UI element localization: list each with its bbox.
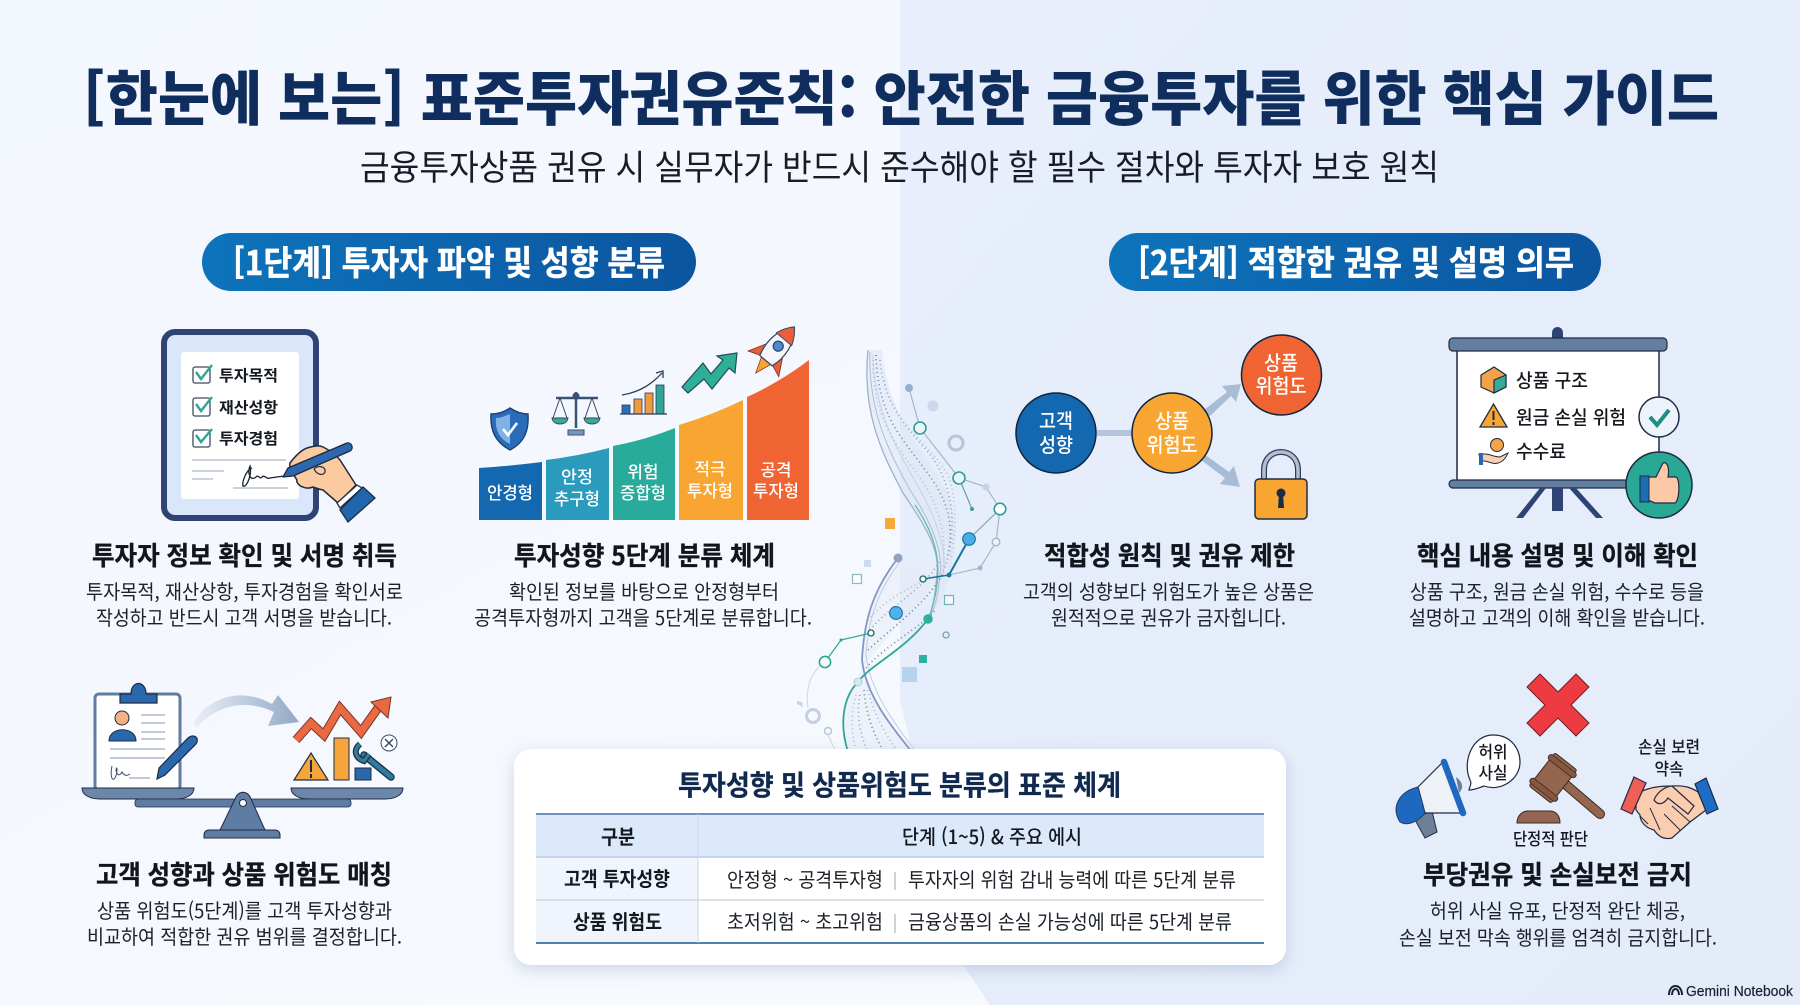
text block: 손실 보전 막속 행위를 엄격히 금지합니다. bbox=[1399, 922, 1717, 951]
icon: shield bbox=[491, 408, 528, 450]
chart: rising risk bars bbox=[479, 360, 809, 520]
icon: megaphone with speech bubble bbox=[1396, 735, 1520, 838]
chart: rising risk bars: 투자형 bbox=[753, 477, 799, 502]
panel: matching customer and product bbox=[82, 684, 403, 950]
panel: key explanation bbox=[1409, 327, 1705, 631]
text block: 허위 사실 유포, 단정적 완단 체공, bbox=[1430, 895, 1685, 924]
text block bbox=[1399, 895, 1717, 951]
heading: 고객 성향과 상품 위험도 매칭 bbox=[96, 855, 392, 892]
text block: 원적적으로 권유가 금자힙니다. bbox=[1051, 602, 1286, 631]
panel: five-level classification bbox=[474, 314, 812, 631]
diagram: suitability flow: 위험도 bbox=[1256, 370, 1306, 399]
heading: 투자자 정보 확인 및 서명 취득 bbox=[92, 536, 397, 573]
icon: handshake with label: 손실 보련 bbox=[1638, 733, 1700, 758]
diagram: suitability flow bbox=[1016, 335, 1322, 487]
icon: presentation board: 수수료 bbox=[1516, 437, 1566, 464]
icon: tablet checklist with signing hand bbox=[164, 332, 375, 522]
heading: step 1 pill: [1단계] 투자자 파악 및 성향 분류 bbox=[233, 236, 665, 285]
panel: suitability principle bbox=[1016, 335, 1322, 631]
diagram: suitability flow: 고객 bbox=[1039, 405, 1073, 434]
text block: 설명하고 고객의 이해 확인을 받습니다. bbox=[1409, 602, 1705, 631]
icon: tablet checklist with signing hand: 투자경험 bbox=[219, 427, 278, 449]
heading: 핵심 내용 설명 및 이해 확인 bbox=[1417, 536, 1698, 573]
text block: 상품 구조, 원금 손실 위험, 수수로 등을 bbox=[1410, 576, 1704, 605]
heading: 적합성 원칙 및 권유 제한 bbox=[1044, 536, 1295, 573]
text block: 고객의 성향보다 위험도가 높은 상품은 bbox=[1023, 576, 1314, 605]
icon: rocket bbox=[740, 314, 810, 386]
chart: rising risk bars: 적극 bbox=[694, 455, 726, 480]
icon: megaphone with speech bubble: 허위 bbox=[1478, 738, 1508, 763]
icon: handshake with label bbox=[1621, 733, 1718, 839]
chart: rising risk bars: 추구형 bbox=[554, 485, 600, 510]
icon: presentation board: 원금 손실 위험 bbox=[1516, 403, 1626, 430]
table: 고객 투자성향 bbox=[564, 863, 670, 892]
icon: presentation board bbox=[1449, 327, 1692, 518]
text block: 공격투자형까지 고객을 5단계로 분류합니다. bbox=[474, 602, 812, 631]
chart: rising risk bars: 위험 bbox=[628, 458, 658, 483]
icon: balance with clipboard and risk chart bbox=[82, 684, 403, 838]
icon: gavel with label: 단정적 판단 bbox=[1513, 825, 1588, 850]
chart: rising risk bars: 공격 bbox=[760, 456, 792, 481]
icon: tablet checklist with signing hand: 투자목적 bbox=[219, 364, 278, 386]
chart: rising risk bars: 투자형 bbox=[687, 477, 733, 502]
icon: presentation board: 상품 구조 bbox=[1516, 366, 1588, 393]
panel: prohibited solicitation bbox=[1396, 674, 1718, 951]
heading: 투자성향 5단계 분류 체계 bbox=[514, 536, 775, 573]
icon: green arrow bbox=[682, 353, 737, 393]
diagram: suitability flow: 성향 bbox=[1039, 429, 1073, 458]
icon: gavel with label bbox=[1513, 751, 1600, 850]
table bbox=[536, 813, 1264, 943]
subtitle: 금융투자상품 권유 시 실무자가 반드시 준수해야 할 필수 절차와 투자자 보호 원칙 bbox=[360, 140, 1439, 191]
icon: balance scale bbox=[552, 392, 600, 435]
text block: 투자목적, 재산상항, 투자경험을 확인서로 bbox=[86, 576, 403, 605]
table title: 투자성향 및 상품위험도 분류의 표준 체계 bbox=[678, 764, 1121, 804]
title: [한눈에 보는] 표준투자권유준칙: 안전한 금융투자를 위한 핵심 가이드 bbox=[83, 52, 1719, 137]
heading: 부당권유 및 손실보전 금지 bbox=[1423, 855, 1692, 892]
chart: rising risk bars: 증합형 bbox=[620, 479, 666, 504]
table: 단계 (1~5) & 주요 에시 bbox=[902, 821, 1082, 850]
text block: 작성하고 반드시 고객 서명을 받습니다. bbox=[96, 602, 392, 631]
table: 상품 위험도 bbox=[573, 906, 662, 935]
central wave and network decoration bbox=[797, 350, 1006, 752]
table: 구분 bbox=[601, 821, 635, 850]
chart: rising risk bars: 안정 bbox=[561, 463, 593, 488]
text block bbox=[474, 576, 812, 631]
diagram: suitability flow: 위험도 bbox=[1146, 429, 1198, 458]
panel: standard classification table bbox=[514, 749, 1286, 965]
chart: rising risk bars: 안경형 bbox=[487, 479, 533, 504]
table: 투자자의 위험 감내 능력에 따른 5단계 분류 bbox=[908, 864, 1236, 893]
watermark: Gemini Notebook: Gemini Notebook bbox=[1686, 983, 1793, 1000]
panel: investor info and signature bbox=[86, 332, 403, 631]
table: 금융상품의 손실 가능성에 따른 5단계 분류 bbox=[908, 906, 1232, 935]
diagram: suitability flow: 상품 bbox=[1264, 347, 1298, 376]
icon: growth bars bbox=[620, 371, 667, 414]
icon: tablet checklist with signing hand: 재산성항 bbox=[219, 396, 278, 418]
text block bbox=[87, 895, 402, 950]
text block bbox=[1409, 576, 1705, 631]
icon: handshake with label: 약속 bbox=[1654, 755, 1684, 780]
icon: padlock bbox=[1255, 452, 1307, 519]
text block: 상품 위험도(5단계)를 고객 투자성향과 bbox=[97, 895, 392, 924]
text block: 비교하여 적합한 권유 범위를 결정합니다. bbox=[87, 921, 402, 950]
icon: red cross bbox=[1527, 674, 1589, 736]
table: 안정형 ~ 공격투자형 bbox=[727, 864, 883, 893]
heading: step 2 pill: [2단계] 적합한 권유 및 설명 의무 bbox=[1138, 236, 1574, 285]
icon: megaphone with speech bubble: 사실 bbox=[1478, 759, 1508, 784]
diagram: suitability flow: 상품 bbox=[1155, 405, 1189, 434]
text block bbox=[86, 576, 403, 631]
text block bbox=[1023, 576, 1314, 631]
text block: 확인된 정보를 바탕으로 안정형부터 bbox=[509, 576, 779, 605]
table: 초저위험 ~ 초고위험 bbox=[727, 906, 883, 935]
